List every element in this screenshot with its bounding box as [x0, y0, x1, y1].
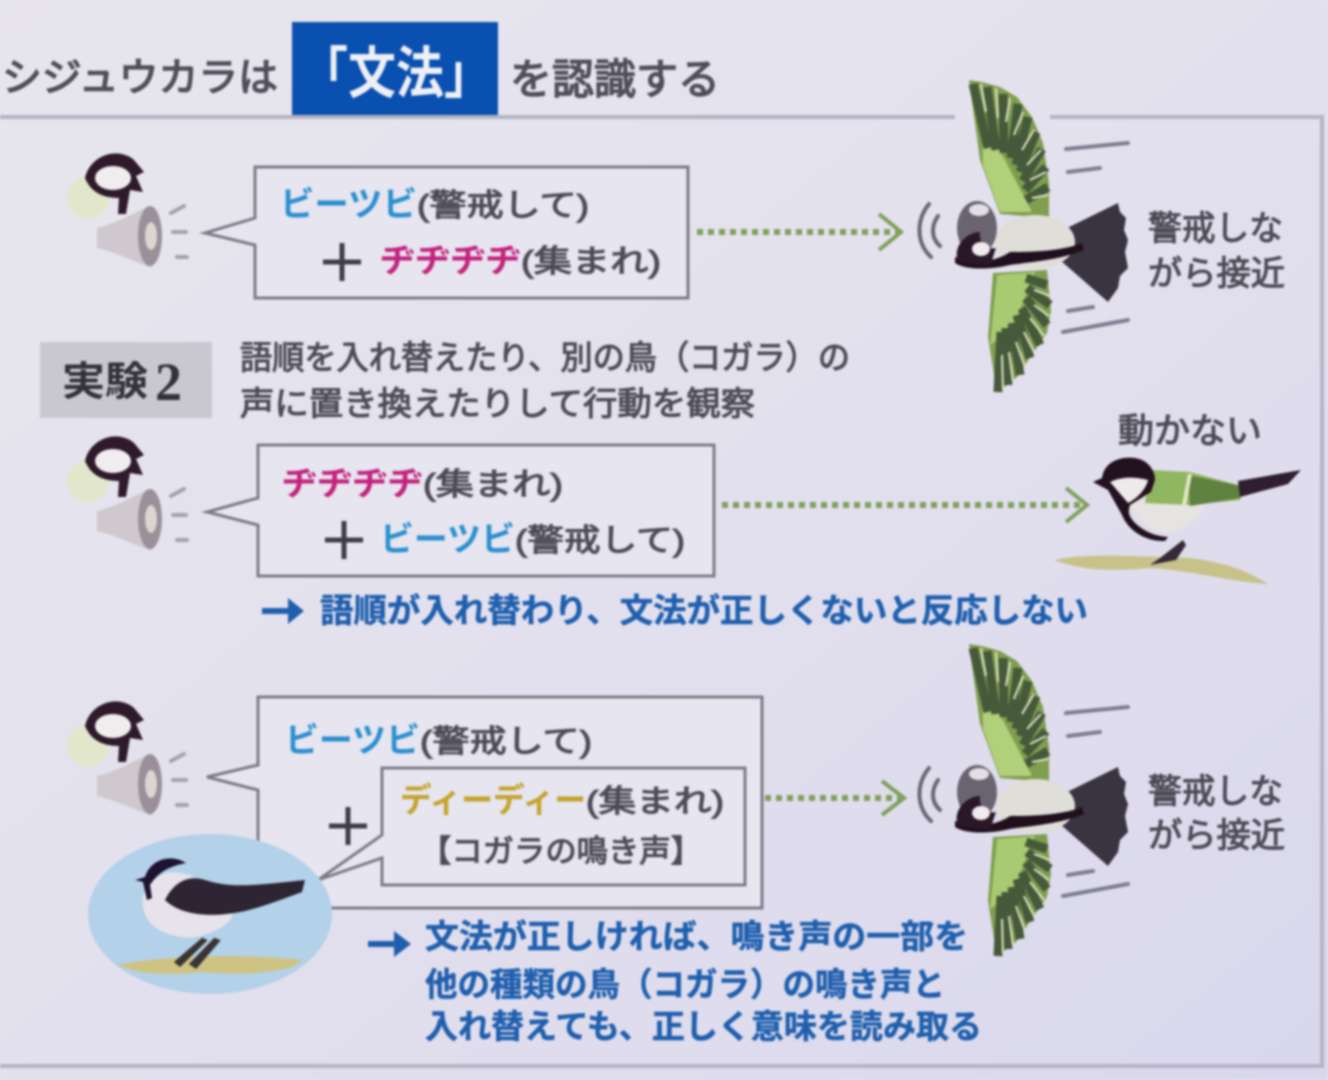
speech text 2: (警戒して)	[515, 523, 685, 558]
speech text 1	[280, 186, 661, 281]
speech text 2	[282, 465, 685, 559]
conclusion: grammar	[368, 918, 982, 1045]
speech box 1	[205, 167, 688, 298]
experiment 2 description: 声に置き換えたりして行動を観察	[240, 385, 755, 422]
arrow: dotted green	[765, 781, 904, 815]
speech text 2: ヂヂヂヂ	[282, 465, 423, 503]
conclusion: word order: 語順が入れ替わり、文法が正しくないと反応しない	[320, 592, 1088, 629]
title: を認識する	[510, 56, 720, 103]
label: approaching: 警戒しな	[1148, 210, 1283, 248]
inner speech box	[318, 768, 745, 885]
speech box 2	[207, 445, 714, 576]
other species row	[67, 644, 1285, 1045]
inner speech box: 【コガラの鳴き声】	[420, 834, 702, 869]
label: approaching	[1148, 773, 1285, 855]
experiment 2 description	[240, 339, 850, 422]
experiment 2 heading: 実験	[62, 360, 148, 404]
icon: coal tit in oval	[88, 834, 332, 994]
conclusion: grammar: 文法が正しければ、鳴き声の一部を	[425, 918, 968, 955]
word order row	[67, 412, 1301, 629]
speech box 3	[207, 697, 762, 908]
title highlight: 文法	[292, 22, 498, 115]
label: approaching: がら接近	[1148, 817, 1285, 855]
experiment 2 description: 語順を入れ替えたり、別の鳥（コガラ）の	[240, 339, 850, 376]
label: approaching: 警戒しな	[1148, 773, 1283, 811]
arrow: dotted green	[697, 214, 901, 250]
arrow: dotted green	[722, 488, 1087, 522]
title	[2, 22, 720, 115]
icon: bird with speaker	[67, 153, 187, 268]
speech text 2: (集まれ)	[423, 467, 563, 502]
speech text 3	[285, 722, 592, 845]
title highlight: 文法: 「文法」	[300, 42, 492, 105]
conclusion: grammar: 他の種類の鳥（コガラ）の鳴き声と	[425, 966, 945, 1003]
icon: perched bird	[1054, 458, 1301, 584]
experiment 1 row	[67, 80, 1285, 393]
label: approaching	[1148, 210, 1285, 293]
speech text 1: (集まれ)	[521, 244, 661, 279]
label: approaching: がら接近	[1148, 255, 1285, 293]
title: シジュウカラは	[2, 57, 278, 100]
speech text 3: ビーツビ	[285, 722, 420, 760]
inner speech box: ディーディー	[400, 781, 586, 820]
icon: bird with speaker	[67, 701, 187, 816]
speech text 3: (警戒して)	[420, 724, 592, 759]
label: does not move: 動かない	[1118, 412, 1262, 451]
inner speech box: (集まれ)	[586, 784, 724, 819]
experiment 2 heading: 2	[155, 352, 182, 412]
speech text 1: ビーツビ	[280, 186, 417, 224]
conclusion: grammar: 入れ替えても、正しく意味を読み取る	[425, 1008, 982, 1045]
icon: bird with speaker	[67, 436, 187, 551]
experiment 2 heading	[40, 342, 212, 418]
speech text 1: ヂヂヂヂ	[380, 242, 521, 280]
speech text 2: ビーツビ	[380, 521, 515, 559]
speech text 1: (警戒して)	[417, 188, 589, 223]
icon: flying bird	[919, 80, 1128, 393]
icon: flying bird	[919, 644, 1128, 957]
